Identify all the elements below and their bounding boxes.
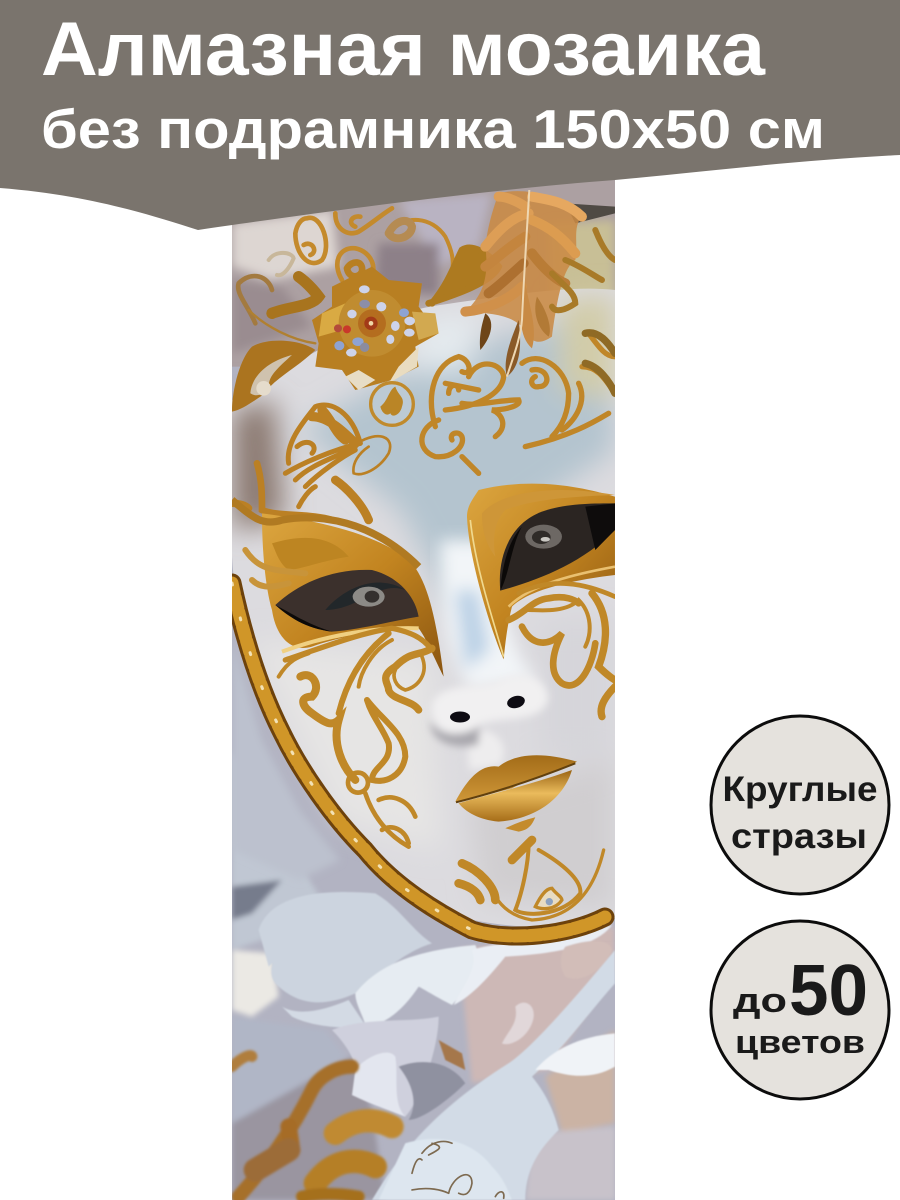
- golden feather: [465, 190, 615, 393]
- left eye: [275, 570, 419, 632]
- ruffle layers: [259, 892, 432, 1002]
- badge: up to 50 colours: цветов: [735, 1024, 865, 1060]
- flower and forehead ornaments: [232, 208, 615, 520]
- ruffled white collar: [232, 850, 615, 1200]
- title: Алмазная мозаика: [41, 7, 766, 92]
- nostrils: [450, 694, 526, 722]
- badge: round rhinestones: стразы: [731, 817, 867, 856]
- badge: up to 50 colours: до: [733, 982, 787, 1020]
- nose: [440, 540, 540, 690]
- golden curls along the top: [238, 208, 499, 343]
- badge: up to 50 colours: 50: [789, 951, 868, 1031]
- header banner: [0, 0, 900, 230]
- badge: up to 50 colours: [711, 921, 889, 1099]
- right eye: [500, 503, 615, 591]
- artwork: venetian mask picture: [231, 170, 615, 1200]
- left silk under border: [233, 665, 336, 874]
- gold filigree on the cheeks: [279, 583, 615, 847]
- mask face: [231, 289, 615, 927]
- gold border of the mask: [232, 583, 605, 936]
- filigree on left forehead: [232, 405, 390, 520]
- gold ornament on the chin: [459, 840, 604, 920]
- right eye ornament: [467, 484, 615, 659]
- gold lips: [455, 755, 577, 832]
- embroidery on the sleeve: [412, 1141, 504, 1198]
- filigree heart: [422, 333, 615, 473]
- badge: round rhinestones: [711, 716, 889, 894]
- subtitle: без подрамника 150х50 см: [41, 98, 825, 160]
- forehead silver-blue sheen: [300, 320, 615, 620]
- left swirl: [232, 341, 315, 412]
- feathers behind the mask: [232, 180, 615, 367]
- gold blurred ornament bottom left: [232, 1055, 392, 1197]
- badge: round rhinestones: Круглые: [722, 770, 878, 809]
- flower: [312, 267, 439, 390]
- left eye ornament: [232, 500, 444, 677]
- rhinestones: [334, 285, 415, 357]
- round medallion under the flower: [371, 383, 413, 425]
